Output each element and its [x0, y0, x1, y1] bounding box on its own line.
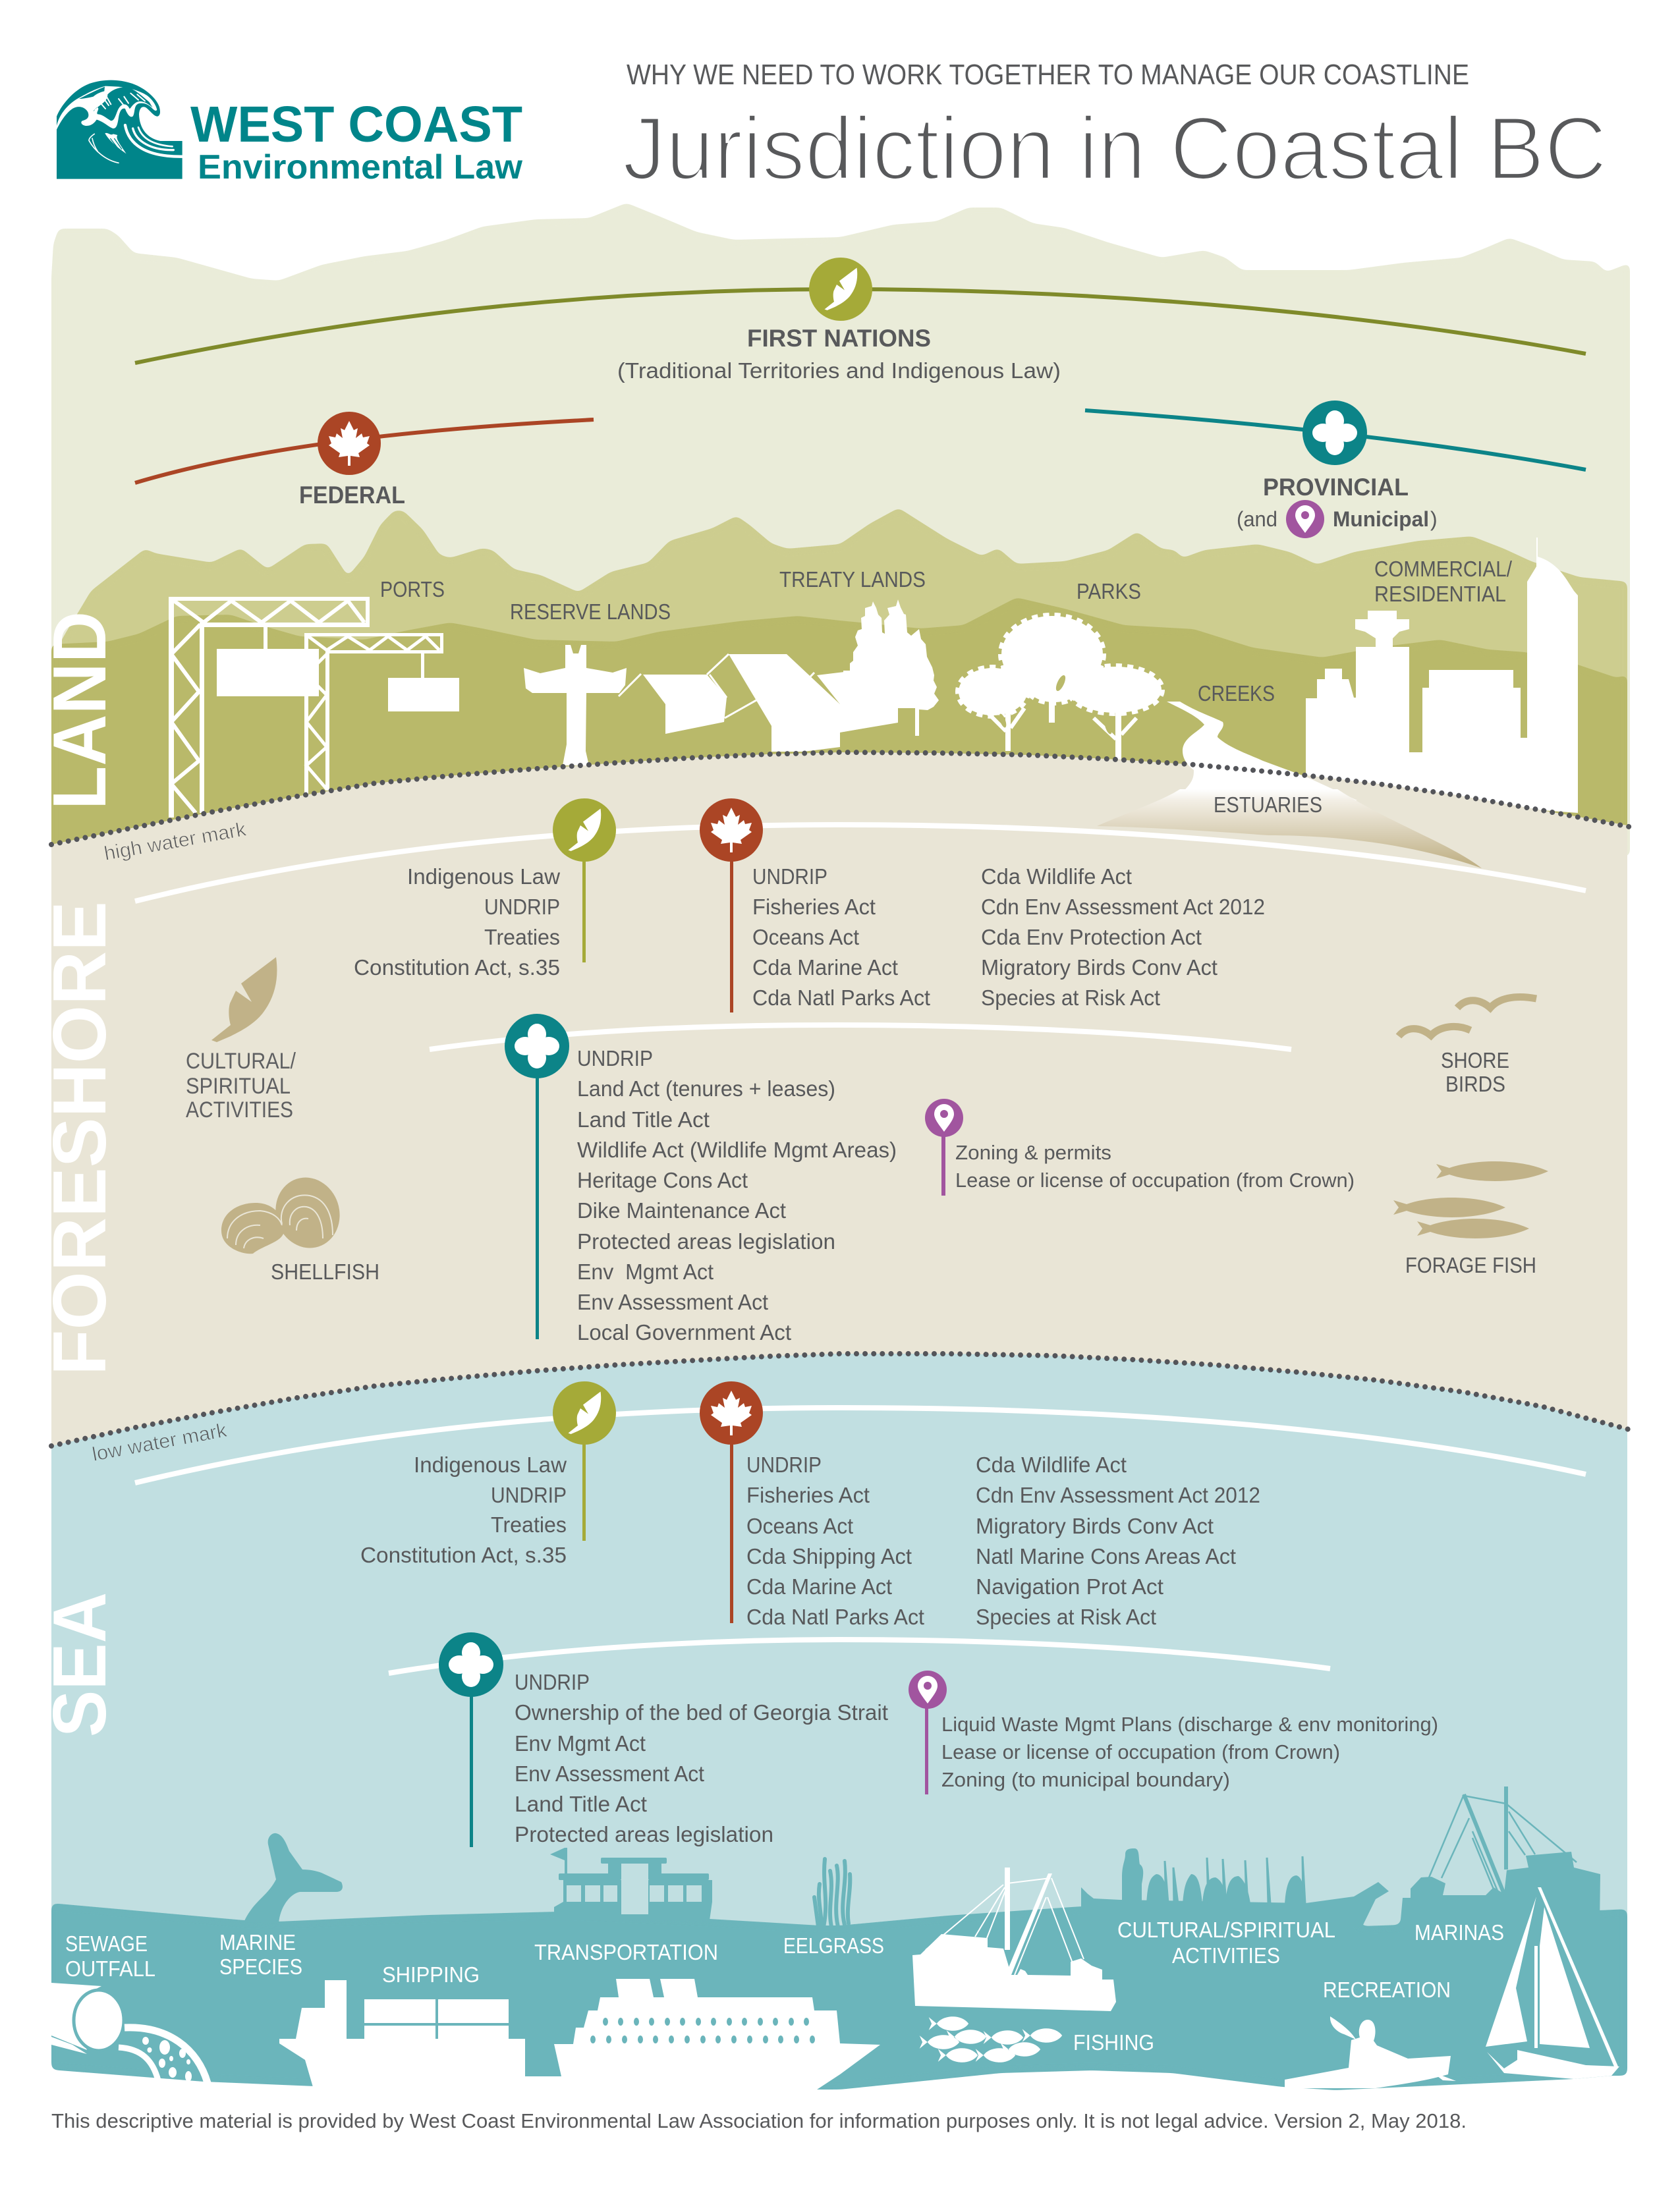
arc: First Nations	[135, 289, 1586, 363]
label: cultural spiritual activities: SPIRITUAL	[186, 1074, 291, 1099]
icon: Federal maple leaf	[318, 412, 381, 475]
arc: Provincial	[1085, 410, 1586, 470]
icon: dogwood pin	[505, 1014, 569, 1078]
section label: LAND: LAND	[38, 611, 122, 810]
sea label: Species: SPECIES	[219, 1954, 302, 1979]
list: sea federal column one: Cda Marine Act	[746, 1574, 892, 1599]
panel: foreshore First Nations laws	[354, 798, 616, 980]
icon: municipal pin	[1286, 500, 1324, 538]
list: foreshore provincial: Land Title Act	[577, 1107, 710, 1132]
list: sea provincial: Env Mgmt Act	[515, 1731, 646, 1756]
list: sea First Nations: UNDRIP	[491, 1483, 567, 1507]
list: sea federal column two	[976, 1453, 1260, 1629]
icon: maple pin	[700, 798, 763, 862]
list: foreshore provincial: Local Government Act	[577, 1320, 791, 1344]
icon: kayaker	[1285, 2016, 1456, 2088]
section label: FORESHORE: FORESHORE	[38, 901, 122, 1375]
sea label: Activities: ACTIVITIES	[1172, 1943, 1280, 1968]
list: sea federal column one: Oceans Act	[746, 1514, 853, 1538]
icon: eelgrass	[814, 1859, 850, 1927]
stem	[582, 850, 586, 962]
list: sea federal column one: UNDRIP	[746, 1453, 822, 1477]
heading: First Nations: FIRST NATIONS	[747, 325, 931, 352]
list: foreshore federal column two: Cda Wildlife Act	[981, 864, 1132, 889]
icon: municipal pin	[909, 1671, 947, 1709]
icon: shellfish	[221, 1169, 349, 1256]
list: sea provincial: Protected areas legislation	[515, 1822, 773, 1846]
list: sea provincial: Env Assessment Act	[515, 1761, 704, 1786]
label: forage fish: FORAGE FISH	[1405, 1253, 1536, 1277]
section label: SEA: SEA	[38, 1592, 122, 1737]
panel: foreshore federal laws	[700, 798, 1265, 1012]
land label: Parks: PARKS	[1077, 579, 1141, 603]
list: sea municipal: Lease or license of occupation (from Crown)	[941, 1740, 1340, 1763]
list: foreshore federal column one: UNDRIP	[752, 864, 827, 889]
list: sea provincial: Ownership of the bed of Georgia Strait	[515, 1700, 888, 1725]
icon: municipal pin	[925, 1099, 963, 1137]
heading: Provincial: PROVINCIAL	[1263, 474, 1409, 501]
icon: feather, cultural and spiritual	[211, 957, 277, 1042]
panel: sea federal laws	[700, 1381, 1260, 1629]
list: foreshore federal column one	[752, 864, 930, 1010]
icon: feather pin	[553, 798, 616, 862]
land label: Residential: RESIDENTIAL	[1374, 582, 1506, 606]
list: sea federal column one: Cda Shipping Act	[746, 1544, 912, 1568]
arc: Federal	[135, 420, 594, 483]
icon: wave	[57, 80, 182, 179]
sea label: Cultural Spiritual: CULTURAL/SPIRITUAL	[1117, 1918, 1335, 1942]
panel: sea provincial laws	[439, 1632, 888, 1847]
sea label: Transportation: TRANSPORTATION	[534, 1940, 718, 1964]
panel: sea First Nations laws	[360, 1381, 616, 1567]
list: foreshore First Nations: UNDRIP	[484, 895, 560, 919]
label: shore birds	[1441, 1048, 1509, 1096]
list: foreshore federal column two: Cda Env Protection Act	[981, 925, 1202, 949]
land label: Estuaries: ESTUARIES	[1214, 792, 1322, 817]
list: sea federal column two: Migratory Birds Conv Act	[976, 1514, 1214, 1538]
arc: foreshore provincial	[430, 1025, 1291, 1049]
icon: marina boat silhouette	[1400, 1787, 1600, 1927]
icon: maple pin	[700, 1381, 763, 1445]
stem	[470, 1686, 473, 1847]
icon: creek	[1167, 702, 1357, 800]
list: foreshore provincial: Env Assessment Act	[577, 1290, 768, 1314]
label: cultural spiritual activities	[186, 1049, 296, 1122]
stem	[925, 1703, 928, 1794]
list: foreshore provincial: Heritage Cons Act	[577, 1168, 748, 1192]
land label: Commercial: COMMERCIAL/	[1374, 557, 1513, 581]
stem	[730, 850, 733, 1012]
list: foreshore provincial: Land Act (tenures + leases)	[577, 1076, 835, 1101]
label: shore birds: BIRDS	[1445, 1072, 1505, 1096]
arc: foreshore upper	[135, 825, 1586, 901]
list: sea federal column two: Navigation Prot Act	[976, 1574, 1163, 1599]
icon: sewage outfall	[51, 1983, 208, 2083]
list: foreshore federal column two: Species at Risk Act	[981, 985, 1160, 1010]
list: foreshore municipal	[955, 1141, 1355, 1192]
label: low water mark: low water mark	[90, 1420, 229, 1466]
list: foreshore provincial: Env Mgmt Act	[577, 1260, 714, 1284]
label: shore birds: SHORE	[1441, 1048, 1509, 1072]
list: sea federal column two: Natl Marine Cons Areas Act	[976, 1544, 1236, 1568]
panel: foreshore provincial laws	[505, 1014, 897, 1344]
icon: totem pole	[524, 645, 627, 765]
logo text: WEST COAST: WEST COAST	[190, 96, 522, 153]
icon: shore birds	[1399, 997, 1536, 1036]
footer disclaimer: This descriptive material is provided by West Coast Environmental Law Association for information purposes only. It is not legal advice. Version 2, May 2018.	[51, 2109, 1467, 2132]
label: cultural spiritual activities: CULTURAL/	[186, 1049, 296, 1074]
icon: estuary	[1097, 789, 1482, 868]
icon: forage fish	[1393, 1161, 1548, 1238]
sea label: Marine: MARINE	[219, 1930, 296, 1954]
icon: sailboat	[1486, 1887, 1619, 2079]
list: sea federal column one: Cda Natl Parks Act	[746, 1605, 924, 1629]
land label: Treaty Lands: TREATY LANDS	[779, 567, 926, 592]
sea label: Shipping: SHIPPING	[382, 1962, 480, 1987]
heading: Federal: FEDERAL	[299, 482, 405, 509]
icon: conifers	[843, 599, 939, 736]
icon: port cranes	[169, 597, 459, 817]
panel: foreshore municipal laws	[925, 1099, 1355, 1196]
list: sea First Nations	[360, 1453, 567, 1567]
stem	[941, 1130, 945, 1196]
list: foreshore provincial	[577, 1046, 897, 1344]
list: sea municipal: Liquid Waste Mgmt Plans (discharge & env monitoring)	[941, 1713, 1438, 1736]
list: foreshore municipal: Zoning & permits	[955, 1141, 1111, 1164]
list: foreshore provincial: Dike Maintenance Act	[577, 1198, 786, 1223]
label: Municipal: Municipal	[1333, 507, 1429, 531]
icon: fish school	[920, 2016, 1062, 2063]
panel: front hills	[51, 597, 1627, 856]
list: foreshore First Nations: Treaties	[484, 925, 560, 949]
list: foreshore federal column two: Cdn Env Assessment Act 2012	[981, 895, 1265, 919]
icon: dogwood pin	[439, 1632, 503, 1697]
land label: Ports: PORTS	[380, 577, 445, 601]
logo: West Coast Environmental Law	[57, 80, 523, 186]
sea label: Fishing: FISHING	[1073, 2030, 1154, 2055]
label: high water mark: high water mark	[102, 818, 248, 865]
icon: container ship	[279, 1980, 567, 2092]
icon: canoe with people	[1081, 1848, 1389, 1926]
list: sea First Nations: Treaties	[491, 1512, 567, 1537]
dotted line: low water mark	[51, 1354, 1634, 1446]
sea label: Eelgrass: EELGRASS	[783, 1933, 884, 1958]
list: foreshore First Nations: Indigenous Law	[407, 864, 560, 889]
icon: houses	[619, 654, 898, 752]
sea label: Recreation: RECREATION	[1323, 1978, 1451, 2002]
list: foreshore municipal: Lease or license of occupation (from Crown)	[955, 1169, 1355, 1192]
list: foreshore provincial: Protected areas legislation	[577, 1229, 835, 1254]
list: sea federal column one: Fisheries Act	[746, 1483, 870, 1507]
icon: Provincial dogwood	[1302, 401, 1367, 465]
logo text: Environmental Law: Environmental Law	[198, 148, 523, 186]
list: foreshore federal column one: Oceans Act	[752, 925, 859, 949]
list: foreshore federal column one: Fisheries Act	[752, 895, 876, 919]
panel: sea	[51, 1354, 1627, 1976]
label: shellfish: SHELLFISH	[271, 1260, 379, 1284]
list: sea federal column one	[746, 1453, 924, 1629]
icon: city skyline	[1306, 538, 1578, 813]
panel: foreshore	[51, 752, 1627, 1515]
panel: nearshore band	[51, 1903, 1627, 2090]
stem	[582, 1433, 586, 1541]
list: foreshore federal column one: Cda Natl Parks Act	[752, 985, 930, 1010]
icon: feather pin	[553, 1381, 616, 1445]
icon: ferry silhouette	[550, 1848, 712, 1920]
label: cultural spiritual activities: ACTIVITIES	[186, 1097, 293, 1122]
list: foreshore federal column two: Migratory Birds Conv Act	[981, 955, 1218, 980]
panel: back mountains	[51, 508, 1627, 725]
land label: Creeks: CREEKS	[1198, 681, 1275, 706]
icon: First Nations feather	[809, 258, 872, 321]
list: sea federal column two: Cdn Env Assessment Act 2012	[976, 1483, 1260, 1507]
stem	[536, 1067, 539, 1339]
sea label: Marinas: MARINAS	[1414, 1920, 1504, 1945]
icon: deciduous trees	[959, 616, 1162, 760]
list: sea provincial	[515, 1670, 888, 1846]
icon: whale tail	[244, 1833, 343, 1924]
icon: passenger ferry	[554, 1979, 880, 2095]
label: closing parenthesis: )	[1430, 507, 1438, 531]
panel: sea municipal laws	[909, 1671, 1438, 1794]
stem	[730, 1433, 733, 1623]
list: foreshore First Nations	[354, 864, 560, 980]
land label: Reserve Lands: RESERVE LANDS	[510, 599, 671, 624]
subtitle: WHY WE NEED TO WORK TOGETHER TO MANAGE OUR COASTLINE	[627, 59, 1469, 91]
list: sea municipal: Zoning (to municipal boundary)	[941, 1768, 1230, 1791]
list: sea federal column two: Species at Risk Act	[976, 1605, 1156, 1629]
list: sea municipal	[941, 1713, 1438, 1791]
list: foreshore federal column two	[981, 864, 1265, 1010]
icon: fishing boat	[912, 1868, 1116, 2011]
panel: sky and distant mountains	[51, 203, 1630, 856]
list: foreshore First Nations: Constitution Act, s.35	[354, 955, 560, 980]
sea label: Outfall: OUTFALL	[65, 1956, 155, 1981]
list: sea First Nations: Indigenous Law	[414, 1453, 567, 1477]
list: sea provincial: UNDRIP	[515, 1670, 590, 1694]
sea label: Sewage: SEWAGE	[65, 1931, 148, 1956]
list: sea First Nations: Constitution Act, s.35	[360, 1543, 567, 1567]
arc: sea upper	[135, 1408, 1586, 1483]
arc: sea provincial	[389, 1640, 1330, 1673]
list: foreshore federal column one: Cda Marine Act	[752, 955, 898, 980]
list: sea provincial: Land Title Act	[515, 1792, 647, 1816]
list: sea federal column two: Cda Wildlife Act	[976, 1453, 1127, 1477]
dotted line: high water mark	[51, 752, 1633, 845]
list: foreshore provincial: UNDRIP	[577, 1046, 653, 1070]
subheading: traditional territories: (Traditional Territories and Indigenous Law)	[617, 358, 1061, 383]
list: foreshore provincial: Wildlife Act (Wildlife Mgmt Areas)	[577, 1138, 897, 1162]
title: Jurisdiction in Coastal BC	[623, 98, 1607, 198]
label: and: (and	[1237, 507, 1277, 531]
